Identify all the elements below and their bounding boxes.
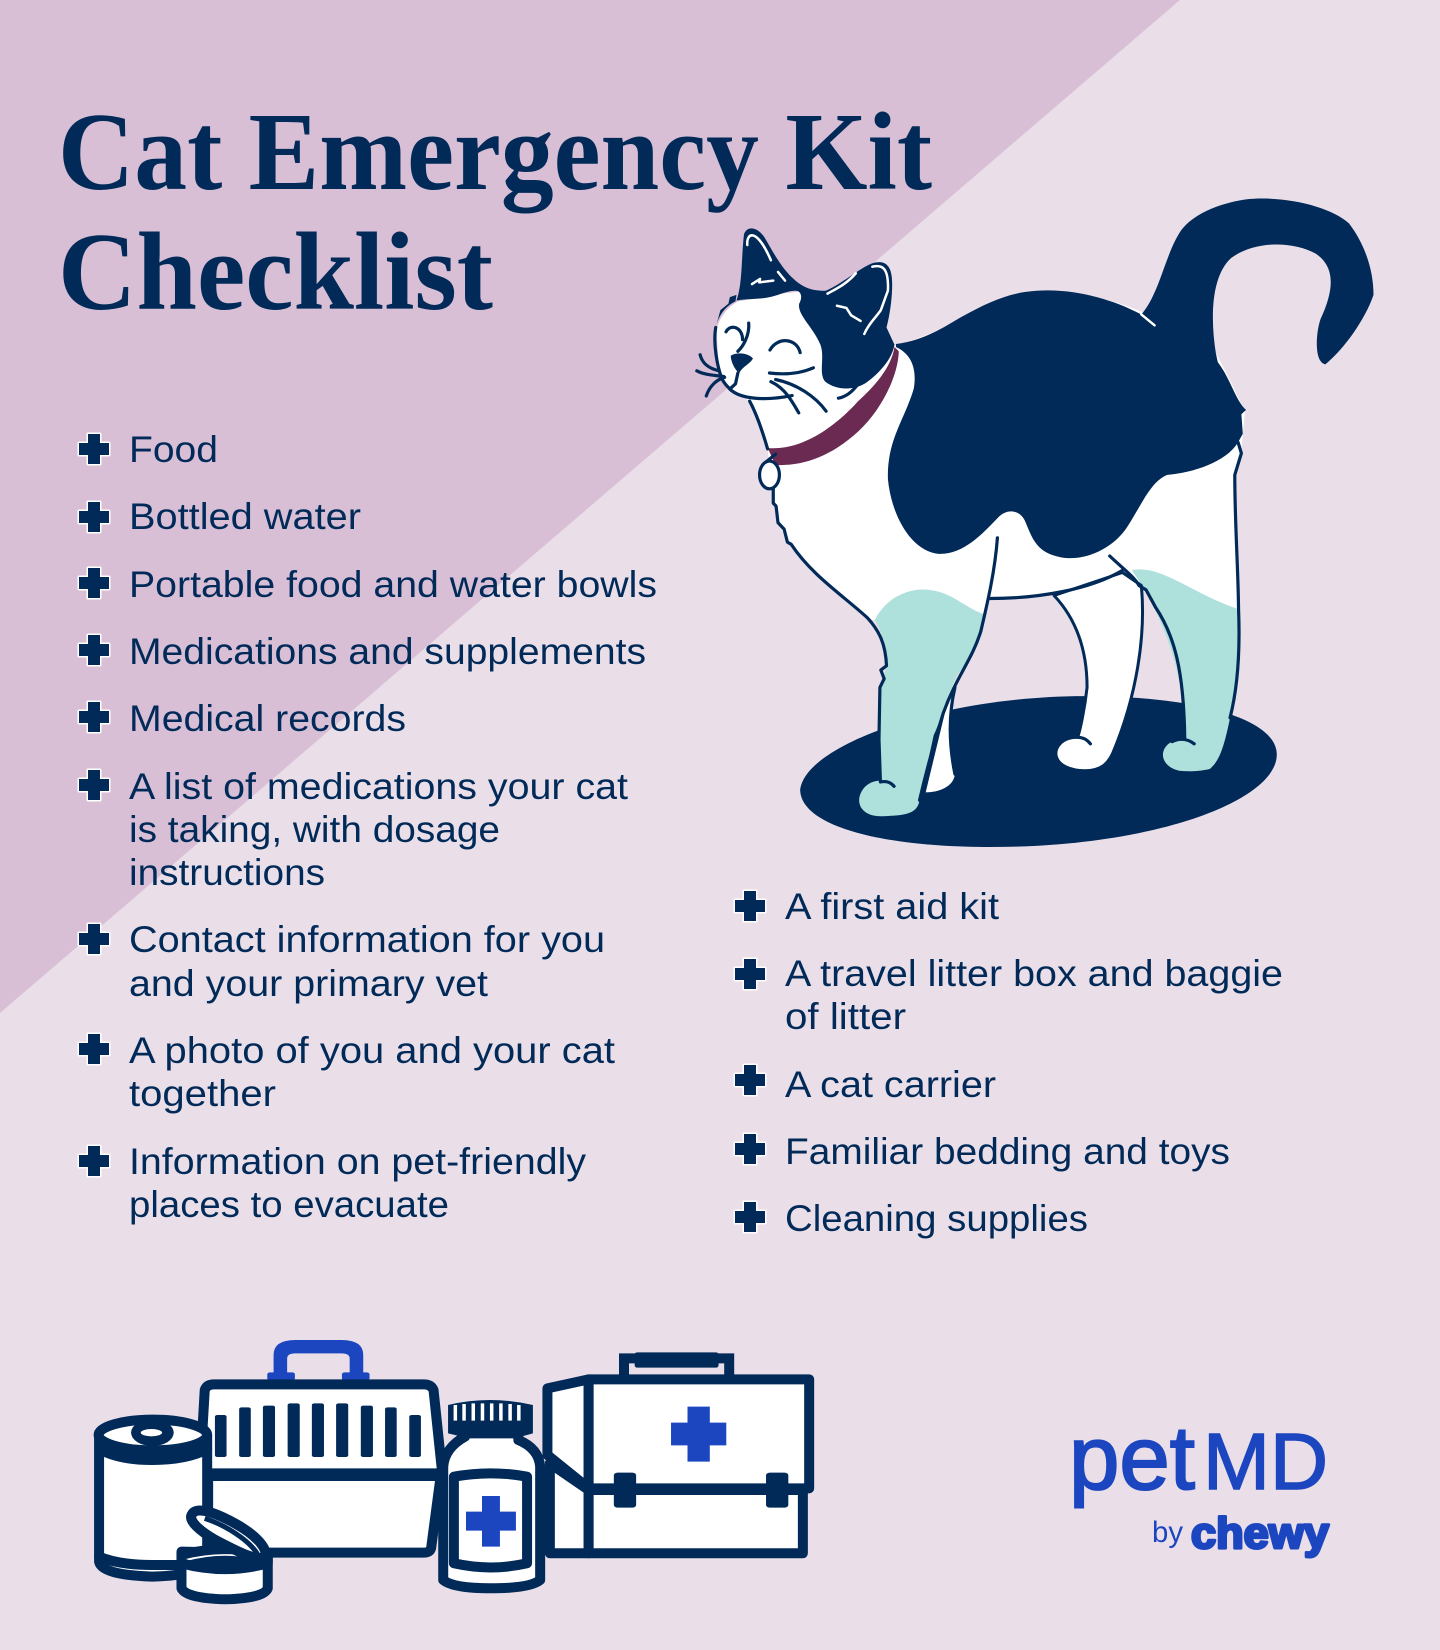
outlines: [715, 327, 1241, 800]
item: litter box: of litter: [785, 996, 906, 1037]
icon: medicine bottle: [443, 1400, 540, 1588]
face fur: [716, 295, 736, 327]
icon: first aid kit: [547, 1352, 809, 1553]
illustration: cat: [697, 199, 1374, 847]
icon: carrier: [200, 1340, 442, 1553]
item: bedding and toys: Familiar bedding and toys: [785, 1131, 1230, 1172]
item: contact information: [79, 919, 605, 1004]
icon: collar tag: [760, 461, 779, 489]
head patch: [736, 228, 895, 389]
item: list of medications: is taking, with dosage: [129, 809, 500, 850]
logo: petMD by chewy: chewy: [1191, 1509, 1330, 1558]
item: list of medications: A list of medications your cat: [129, 766, 629, 807]
title: [58, 91, 932, 334]
logo: petMD by chewy: [1069, 1409, 1330, 1558]
title: Cat Emergency Kit: [58, 91, 932, 214]
item: contact information: and your primary vet: [129, 963, 489, 1004]
item: first aid kit: A first aid kit: [785, 886, 1000, 927]
checklist: left column: [79, 429, 657, 1225]
item: contact information: Contact information for you: [129, 919, 605, 960]
item: food: Food: [129, 429, 218, 470]
item: photo: together: [129, 1073, 276, 1114]
item: list of medications: instructions: [129, 852, 325, 893]
collar: [768, 347, 899, 465]
item: evacuation places: [79, 1141, 587, 1225]
item: bottled water: Bottled water: [129, 496, 361, 537]
item: cat carrier: A cat carrier: [785, 1064, 996, 1105]
icon: open can: [181, 1510, 268, 1599]
logo: petMD by chewy: pet: [1069, 1409, 1195, 1509]
illustration: emergency supplies: [99, 1340, 809, 1599]
right hind leg: [1132, 569, 1238, 771]
item: medications and supplements: Medications and supplements: [129, 631, 646, 672]
item: cleaning supplies: Cleaning supplies: [785, 1198, 1088, 1239]
item: litter box: A travel litter box and baggie: [785, 953, 1283, 994]
logo: petMD by chewy: by: [1152, 1516, 1183, 1549]
item: photo: [79, 1030, 616, 1114]
face: [697, 235, 1155, 413]
title: Checklist: [58, 211, 493, 334]
item: bowls: Portable food and water bowls: [129, 564, 657, 605]
logo: petMD by chewy: MD: [1203, 1417, 1328, 1506]
item: list of medications: [79, 766, 629, 893]
front leg: [859, 590, 986, 816]
far front leg: [926, 679, 955, 792]
checklist: right column: [735, 886, 1283, 1239]
body: [717, 291, 1245, 620]
diagonal background panel: [0, 0, 1180, 1013]
item: photo: A photo of you and your cat: [129, 1030, 616, 1071]
item: food: [79, 429, 218, 470]
item: litter box: [735, 953, 1283, 1037]
icon: tin can: [99, 1419, 207, 1577]
shadow: [800, 696, 1277, 847]
middle hind leg: [1054, 572, 1143, 771]
item: medical records: Medical records: [129, 698, 406, 739]
tail and back patch: [888, 199, 1374, 558]
item: evacuation places: Information on pet-friendly: [129, 1141, 587, 1182]
item: evacuation places: places to evacuate: [129, 1184, 449, 1225]
